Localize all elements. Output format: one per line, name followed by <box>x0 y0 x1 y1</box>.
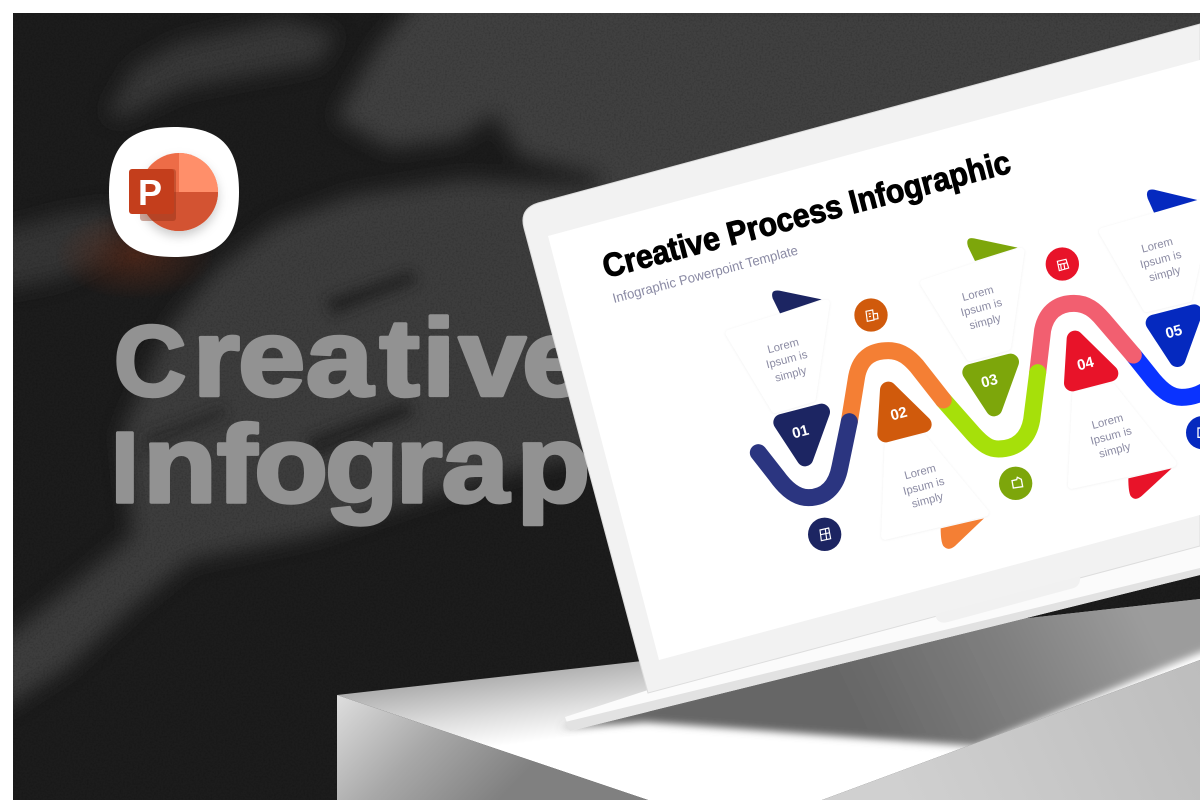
box top face <box>337 599 1200 800</box>
display box <box>337 599 1200 800</box>
wave path <box>758 303 1200 498</box>
icon glow <box>76 224 200 292</box>
laptop screen <box>548 60 1200 660</box>
card 5: simply <box>1148 264 1182 284</box>
box right face <box>822 660 1200 800</box>
step 05: 05 <box>1164 322 1184 342</box>
step 04: 04 <box>1075 353 1096 374</box>
slide content <box>598 143 1200 551</box>
step 01: 01 <box>790 422 811 442</box>
icon circle: green tag <box>999 467 1032 500</box>
lid notch <box>935 576 1080 623</box>
icon: PowerPoint logo <box>109 127 239 257</box>
card 2 <box>886 466 986 549</box>
icon circle: blue <box>1186 416 1200 449</box>
laptop base <box>565 540 1200 731</box>
step 05 <box>1154 313 1194 359</box>
card 4: Ipsum is <box>1089 425 1133 448</box>
heading: Creative Infographic (partly behind laptop) <box>111 296 757 526</box>
card 2: Ipsum is <box>902 475 946 498</box>
step 03: 03 <box>979 371 1000 392</box>
icon: PowerPoint logo: P <box>138 172 162 213</box>
box left face <box>337 695 648 800</box>
card 4 <box>1073 416 1174 499</box>
step 02 <box>886 390 923 434</box>
heading: Creative Infographic (partly behind laptop): nfographic <box>143 402 757 526</box>
laptop <box>523 24 1200 731</box>
card 5 <box>1140 190 1198 312</box>
heading: Creative Infographic (partly behind laptop): reative <box>193 296 589 419</box>
step 03 <box>971 362 1011 408</box>
card 5: Ipsum is <box>1139 249 1183 271</box>
step 02: 02 <box>889 404 909 424</box>
heading: Creative Infographic (partly behind laptop): C <box>114 306 186 418</box>
card 4: simply <box>1098 441 1132 461</box>
slide title: Creative Process Infographic <box>598 143 1014 285</box>
card 1 <box>766 290 822 414</box>
card 2: simply <box>911 491 945 511</box>
card 2: Lorem <box>903 463 937 482</box>
laptop lid <box>523 24 1200 693</box>
step 04 <box>1072 339 1110 383</box>
card 3: Lorem <box>961 284 995 304</box>
card 3: Ipsum is <box>960 297 1004 319</box>
icon circle: orange building <box>854 298 888 332</box>
icon circle: navy building <box>808 518 841 551</box>
card 4: Lorem <box>1091 412 1125 432</box>
slide subtitle: Infographic Powerpoint Template <box>611 243 799 306</box>
card 3 <box>960 238 1018 362</box>
heading: Creative Infographic (partly behind laptop): I <box>111 412 139 524</box>
card 1: Ipsum is <box>765 349 809 371</box>
laptop cast shadow <box>562 599 1200 750</box>
card 1: Lorem <box>766 337 800 356</box>
card 1: simply <box>774 365 808 385</box>
step 01 <box>782 412 822 458</box>
card 3: simply <box>968 312 1003 332</box>
card 5: Lorem <box>1140 236 1174 256</box>
icon circle: red chart <box>1046 247 1079 281</box>
